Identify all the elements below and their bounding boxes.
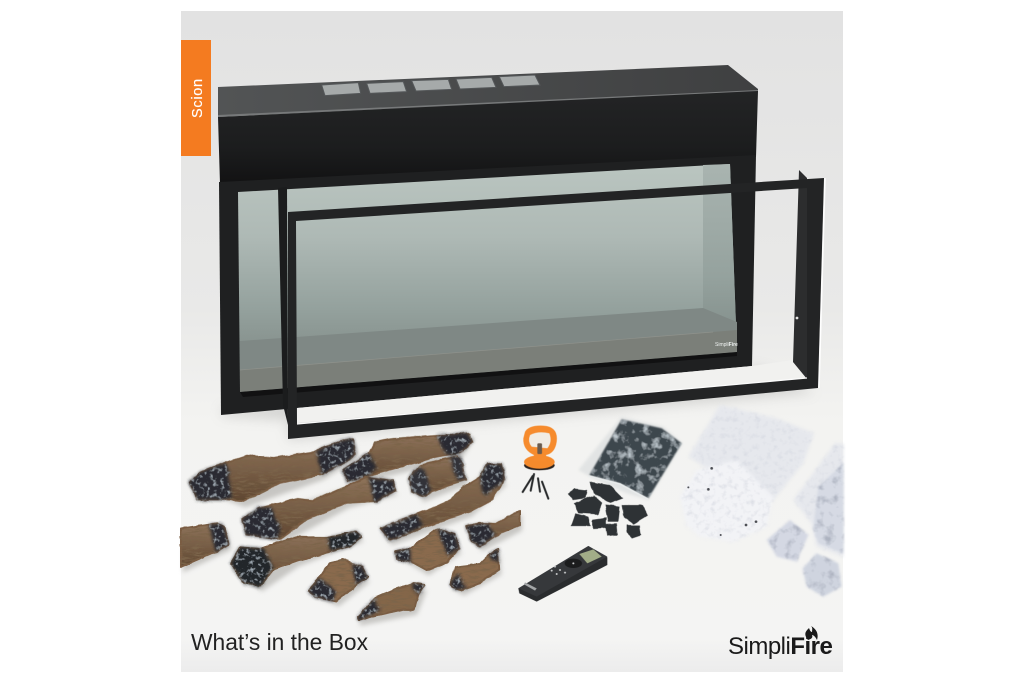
bag of clear small beads [680,405,814,542]
log 9 [395,528,460,570]
log shadows [183,438,522,626]
suction cup tool [523,426,557,470]
inner trim [240,352,737,397]
photo panel background [181,11,843,672]
screws [523,474,548,499]
fireplace outer frame [219,155,756,415]
firebox front floor band [240,330,737,392]
log 10 [450,548,499,590]
log 11 [308,559,368,601]
caption: What’s in the Box [191,629,369,655]
orange tag [181,40,211,156]
frame left flange [278,187,288,425]
large clear ice pieces [767,520,842,597]
log set [181,433,522,626]
firebox rear floor band [240,308,737,392]
remote control [518,546,607,602]
frame face [288,178,824,439]
bag of dark glass [578,417,683,500]
right inner wall [703,164,737,352]
log 7 [230,531,362,588]
log 12 [357,583,425,621]
bag of large clear ice [793,443,843,557]
SimpliFire logo: SimpliFire [728,633,833,660]
loose trim frame [278,170,825,439]
log pieces [181,433,519,621]
log 2 [343,433,473,482]
log 4 [242,477,396,539]
tag label: Scion [190,78,206,118]
log 3 [408,457,466,497]
log 5 [380,463,505,541]
frame right flange [793,170,807,379]
fireplace top panel with vents [218,65,758,117]
glass logo: SimpliFire [715,342,738,348]
fireplace unit [218,65,758,415]
fireplace hood [218,91,758,184]
log 6 [181,523,229,567]
log 8 [466,511,519,547]
floor shadow under fireplace [222,368,815,440]
icon: flame [805,626,818,640]
floor visible through frame [297,358,807,423]
log 1 [188,439,356,501]
fireplace glass [238,164,738,392]
top vents [322,75,540,96]
accessories [518,405,843,602]
dark glass rocks [568,482,648,538]
